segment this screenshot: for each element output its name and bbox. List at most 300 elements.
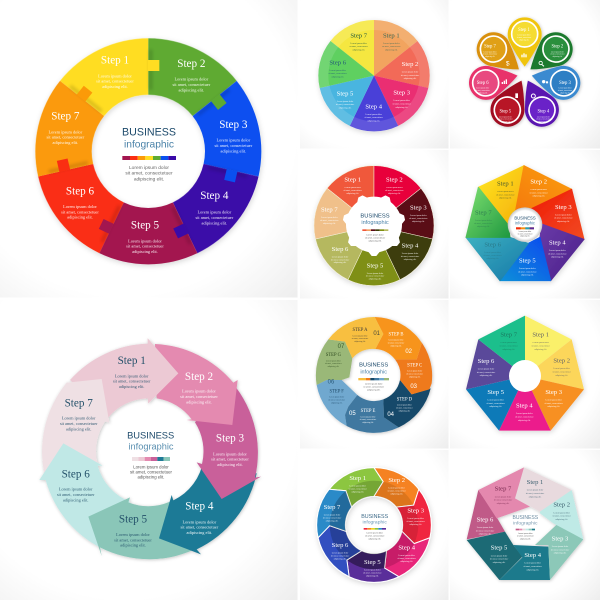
step labels: Lorem ipsum dolor (182, 519, 217, 524)
step labels: Step 2 (530, 179, 547, 186)
step labels: Step 5 (487, 389, 505, 396)
step labels: sit amet, consectetuer (352, 338, 369, 340)
step labels: adipiscing elit. (67, 215, 93, 220)
step labels: Lorem ipsum dolor (518, 35, 531, 37)
step labels: Step 1 (101, 55, 129, 67)
step labels: adipiscing elit. (478, 91, 488, 94)
step labels: Step 3 (552, 535, 569, 542)
step labels: Lorem ipsum dolor (527, 490, 543, 492)
step labels: Lorem ipsum dolor (495, 496, 511, 498)
step labels: Lorem ipsum dolor (216, 138, 251, 143)
center title (514, 216, 536, 238)
step labels: Step 2 (388, 477, 405, 484)
panel: pastel arrow ring (39, 338, 261, 559)
step labels: sit amet, consectetuer (490, 559, 508, 561)
center title: Lorem ipsum dolor (129, 165, 169, 171)
center title: sit amet, consectetuer (365, 236, 385, 239)
center title: infographic (362, 520, 387, 526)
step labels: Lorem ipsum dolor (329, 397, 344, 399)
step labels: sit amet, consectetuer (215, 143, 253, 149)
center title (512, 515, 539, 540)
step labels: Step 6 (66, 186, 95, 198)
step labels: adipiscing elit. (529, 495, 542, 498)
step labels (477, 332, 571, 422)
step labels: Step 1 (518, 28, 531, 33)
step labels: sit amet, consectetuer (483, 255, 502, 257)
step labels: Step 2 (553, 358, 570, 365)
step labels: Step 7 (484, 45, 497, 50)
center title: BUSINESS (360, 214, 390, 220)
step numbers: 01 (373, 331, 381, 337)
step labels: Step 3 (393, 90, 411, 97)
step labels: adipiscing elit. (534, 348, 547, 351)
step labels: Lorem ipsum dolor (388, 487, 405, 489)
panel: folded heptagon (467, 467, 583, 580)
step labels: Step 5 (519, 258, 536, 265)
step labels: Step 4 (537, 110, 550, 115)
step labels: Step 2 (185, 371, 213, 383)
step labels: STEP G (326, 353, 342, 358)
step labels: Step 7 (51, 111, 80, 123)
step labels: adipiscing elit. (497, 502, 510, 505)
step labels: adipiscing elit. (186, 530, 212, 535)
step labels: Step 4 (549, 240, 566, 247)
step numbers: 06 (328, 380, 335, 386)
step labels: Lorem ipsum dolor (484, 252, 501, 254)
step labels: adipiscing elit. (499, 196, 512, 199)
step labels: sit amet, consectetuer (552, 516, 571, 518)
step labels: adipiscing elit. (323, 222, 336, 225)
step labels: Lorem ipsum dolor (48, 129, 83, 134)
step labels (476, 479, 571, 571)
step labels: adipiscing elit. (334, 557, 347, 560)
step numbers: 05 (349, 411, 356, 417)
step labels: sit amet, consectetuer (173, 82, 211, 88)
step labels: adipiscing elit. (186, 399, 212, 404)
step labels: sit amet, consectetuer (57, 492, 95, 498)
step labels: Lorem ipsum dolor (519, 268, 536, 270)
step labels: adipiscing elit. (326, 519, 339, 522)
step labels: Lorem ipsum dolor (476, 88, 490, 90)
step numbers (328, 331, 418, 418)
center title: BUSINESS (127, 431, 174, 441)
step numbers: 04 (387, 412, 395, 418)
step labels: adipiscing elit. (489, 405, 502, 408)
step labels: sit amet, consectetuer (387, 490, 406, 492)
panel: teardrop pins (466, 17, 584, 132)
step labels: Lorem ipsum dolor (367, 273, 383, 275)
step labels: sit amet, consectetuer (498, 119, 513, 121)
ring pieces (316, 317, 432, 433)
step labels: STEP D (397, 397, 413, 402)
step labels: Step 7 (495, 486, 512, 493)
step labels: adipiscing elit. (352, 48, 365, 51)
step labels: sit amet, consectetuer (550, 54, 565, 56)
step labels: adipiscing elit. (63, 497, 89, 502)
step labels: sit amet, consectetuer (396, 407, 413, 409)
step labels: Step 4 (185, 500, 214, 512)
step labels: adipiscing elit. (412, 220, 425, 223)
center title: Lorem ipsum dolor (518, 532, 533, 535)
step labels: Lorem ipsum dolor (397, 405, 412, 407)
step labels: sit amet, consectetuer (401, 75, 419, 77)
step labels (328, 32, 419, 122)
step labels: sit amet, consectetuer (392, 103, 411, 105)
step labels: adipiscing elit. (404, 258, 417, 261)
center title: sit amet, consectetuer (518, 232, 533, 235)
step labels: Step 5 (499, 110, 512, 115)
step labels: adipiscing elit. (502, 348, 515, 351)
panel: numbered step A to G ring (316, 317, 432, 433)
step labels: adipiscing elit. (480, 374, 493, 377)
step labels: Lorem ipsum dolor (499, 116, 512, 118)
step labels: Lorem ipsum dolor (329, 70, 346, 72)
step labels: Step 6 (477, 516, 494, 523)
panel: rainbow puzzle ring (19, 12, 292, 291)
center title: adipiscing elit. (520, 537, 531, 540)
step labels: Lorem ipsum dolor (524, 563, 541, 565)
step labels: Step 2 (386, 177, 403, 184)
step labels: adipiscing elit. (369, 277, 382, 280)
step labels: Step 3 (559, 81, 572, 86)
step labels: sit amet, consectetuer (515, 416, 534, 418)
heptagon wedges (466, 316, 584, 431)
step labels: sit amet, consectetuer (211, 457, 249, 463)
step labels: Step 4 (402, 243, 419, 250)
center title: adipiscing elit. (368, 239, 382, 242)
pin icons: $ (506, 61, 510, 68)
step labels: adipiscing elit. (521, 273, 534, 276)
step labels: Step 6 (332, 542, 349, 549)
step labels: Lorem ipsum dolor (559, 88, 572, 90)
step labels (47, 55, 253, 254)
step labels: Lorem ipsum dolor (386, 187, 403, 189)
step labels: Step 5 (337, 90, 354, 97)
step labels: sit amet, consectetuer (60, 421, 98, 427)
step labels: Step 1 (532, 332, 549, 339)
step labels: Lorem ipsum dolor (477, 527, 493, 529)
step labels: sit amet, consectetuer (366, 276, 384, 278)
step labels: Lorem ipsum dolor (402, 71, 418, 73)
step labels: sit amet, consectetuer (113, 379, 151, 385)
step labels: adipiscing elit. (120, 543, 146, 548)
step labels: sit amet, consectetuer (348, 488, 367, 490)
step labels: Step 5 (367, 262, 384, 269)
step labels: STEP B (389, 332, 403, 337)
step labels: Lorem ipsum dolor (497, 191, 514, 193)
step labels: STEP F (329, 389, 344, 394)
step labels: sit amet, consectetuer (343, 190, 362, 192)
step labels: Lorem ipsum dolor (361, 416, 376, 418)
step labels: adipiscing elit. (351, 490, 364, 493)
step labels: Step 1 (383, 32, 400, 39)
step labels: sit amet, consectetuer (196, 215, 234, 221)
step labels: sit amet, consectetuer (406, 521, 425, 523)
step labels: Lorem ipsum dolor (115, 373, 149, 378)
step numbers: 07 (338, 344, 345, 350)
center title: adipiscing elit. (367, 389, 381, 392)
step labels: sit amet, consectetuer (554, 218, 573, 220)
step labels: adipiscing elit. (217, 462, 243, 467)
step labels: Lorem ipsum dolor (383, 43, 400, 45)
step labels: adipiscing elit. (119, 384, 145, 389)
step labels: Step 4 (398, 545, 416, 552)
step labels: Lorem ipsum dolor (213, 451, 247, 456)
step labels: STEP E (361, 409, 376, 414)
center title: adipiscing elit. (368, 538, 381, 541)
step labels: adipiscing elit. (220, 148, 246, 153)
step labels: Step 7 (65, 397, 93, 409)
step labels: Lorem ipsum dolor (475, 220, 492, 222)
step labels: Lorem ipsum dolor (364, 569, 381, 571)
step labels: Lorem ipsum dolor (500, 342, 517, 344)
step labels: sit amet, consectetuer (544, 403, 563, 405)
center title (358, 363, 389, 392)
step labels: sit amet, consectetuer (526, 493, 544, 495)
step labels: Lorem ipsum dolor (353, 335, 368, 337)
step labels: Lorem ipsum dolor (174, 77, 209, 82)
center title: Lorem ipsum dolor (366, 233, 384, 236)
center hole (509, 360, 541, 392)
step labels: Step 3 (219, 119, 248, 131)
step labels: Step 5 (364, 559, 381, 566)
step labels: sit amet, consectetuer (531, 345, 550, 347)
step labels: sit amet, consectetuer (409, 218, 428, 220)
center title: BUSINESS (359, 363, 388, 369)
step labels: adipiscing elit. (555, 518, 568, 521)
step labels: sit amet, consectetuer (529, 192, 548, 194)
center title: adipiscing elit. (520, 235, 530, 238)
step labels: sit amet, consectetuer (406, 373, 423, 375)
step labels: adipiscing elit. (385, 48, 398, 51)
step labels: adipiscing elit. (555, 374, 568, 377)
step labels: Step 4 (200, 190, 229, 202)
step labels: adipiscing elit. (178, 87, 204, 92)
step labels: sit amet, consectetuer (401, 256, 419, 258)
step labels: Lorem ipsum dolor (549, 250, 566, 252)
step labels: Lorem ipsum dolor (530, 189, 547, 191)
step labels: adipiscing elit. (547, 405, 560, 408)
center title (122, 126, 176, 182)
step labels: Step 3 (216, 432, 245, 444)
step labels: sit amet, consectetuer (331, 259, 349, 261)
step labels: adipiscing elit. (334, 261, 347, 264)
step labels: Lorem ipsum dolor (545, 399, 562, 401)
step labels: Lorem ipsum dolor (555, 214, 572, 216)
step labels: adipiscing elit. (399, 409, 411, 412)
step labels: sit amet, consectetuer (181, 525, 219, 531)
step labels: Lorem ipsum dolor (516, 413, 533, 415)
step labels: Step 7 (350, 32, 368, 39)
puzzle tabs (48, 50, 247, 245)
center title: sit amet, consectetuer (125, 171, 173, 177)
step labels: Step 3 (410, 205, 427, 212)
center title: Lorem ipsum dolor (366, 532, 383, 535)
step labels: adipiscing elit. (346, 192, 359, 195)
step labels: sit amet, consectetuer (363, 572, 382, 574)
step labels: Step 1 (118, 355, 146, 367)
center title: sit amet, consectetuer (363, 386, 384, 389)
step labels: Step 4 (524, 552, 542, 559)
center title: sit amet, consectetuer (365, 535, 385, 538)
step labels: Step 6 (478, 358, 495, 365)
step labels: sit amet, consectetuer (517, 37, 532, 39)
step labels: adipiscing elit. (519, 38, 529, 41)
step labels: Step 6 (329, 59, 347, 66)
step labels: sit amet, consectetuer (126, 244, 164, 250)
center title: Lorem ipsum dolor (133, 464, 169, 469)
step labels: Lorem ipsum dolor (62, 416, 96, 421)
step labels: Lorem ipsum dolor (393, 100, 410, 102)
step labels: Lorem ipsum dolor (116, 532, 150, 537)
step labels: sit amet, consectetuer (61, 209, 99, 215)
step labels: Lorem ipsum dolor (324, 514, 340, 516)
step labels: Lorem ipsum dolor (321, 217, 338, 219)
step labels: adipiscing elit. (493, 561, 506, 564)
step labels: adipiscing elit. (331, 401, 343, 404)
step labels: Lorem ipsum dolor (63, 204, 97, 209)
step labels: Lorem ipsum dolor (478, 368, 494, 370)
step labels: adipiscing elit. (390, 344, 402, 347)
step labels: Lorem ipsum dolor (365, 114, 382, 116)
step labels: Step 2 (553, 502, 570, 509)
step labels: sit amet, consectetuer (114, 537, 152, 543)
step labels: sit amet, consectetuer (331, 555, 349, 557)
step labels: Step 1 (527, 479, 543, 486)
step labels: adipiscing elit. (485, 55, 495, 58)
arrow segments (39, 338, 261, 559)
step labels: adipiscing elit. (500, 120, 511, 123)
step labels (476, 28, 573, 123)
chevron segments (308, 454, 447, 596)
step labels: adipiscing elit. (518, 419, 531, 422)
step labels: sit amet, consectetuer (360, 419, 377, 421)
step labels: adipiscing elit. (354, 340, 366, 343)
step labels: Step 1 (349, 475, 366, 482)
step labels: adipiscing elit. (560, 91, 570, 94)
step labels: Lorem ipsum dolor (532, 342, 549, 344)
step labels: Lorem ipsum dolor (332, 256, 348, 258)
step labels: sit amet, consectetuer (486, 403, 505, 405)
step labels: sit amet, consectetuer (476, 530, 494, 532)
step labels: Step 6 (332, 246, 349, 253)
step labels: sit amet, consectetuer (494, 500, 512, 502)
step labels: Lorem ipsum dolor (398, 555, 415, 557)
step labels: sit amet, consectetuer (483, 54, 498, 56)
step numbers: 03 (410, 384, 418, 390)
step labels: adipiscing elit. (532, 194, 545, 197)
step labels: Step 5 (131, 219, 160, 231)
step labels: sit amet, consectetuer (320, 220, 339, 222)
center title: infographic (360, 369, 387, 375)
step labels: Step 2 (177, 58, 205, 70)
panel: pie chart seven steps (310, 7, 445, 145)
step labels: sit amet, consectetuer (364, 117, 383, 119)
step labels: Lorem ipsum dolor (344, 187, 361, 189)
step labels: Step 7 (321, 207, 338, 214)
step labels: Step 4 (365, 103, 383, 110)
hub (508, 207, 542, 242)
step labels: sit amet, consectetuer (328, 73, 347, 75)
step labels: Step 3 (407, 508, 425, 515)
step labels: Lorem ipsum dolor (98, 73, 132, 78)
center title: adipiscing elit. (134, 176, 164, 182)
step labels: sit amet, consectetuer (496, 194, 515, 196)
center title: BUSINESS (514, 216, 536, 221)
panel: chevron ring (308, 454, 447, 596)
step labels: Step 6 (484, 241, 502, 248)
center title: infographic (361, 220, 389, 226)
step labels: sit amet, consectetuer (336, 104, 354, 106)
gear center (342, 194, 406, 256)
step labels: adipiscing elit. (367, 119, 380, 122)
step labels: sit amet, consectetuer (552, 371, 571, 373)
step labels: Lorem ipsum dolor (350, 43, 367, 45)
step labels (323, 475, 425, 577)
panel: twisted heptagon (466, 166, 584, 281)
center title (360, 214, 390, 242)
step labels: sit amet, consectetuer (328, 399, 345, 401)
step labels: adipiscing elit. (362, 421, 374, 424)
step numbers: 02 (405, 349, 413, 355)
step labels: Lorem ipsum dolor (59, 487, 93, 492)
pin shapes (466, 17, 584, 132)
step labels: sit amet, consectetuer (523, 566, 542, 568)
step labels: Lorem ipsum dolor (487, 399, 504, 401)
step labels: sit amet, consectetuer (536, 119, 551, 121)
step labels: adipiscing elit. (479, 533, 492, 536)
step labels: Step 2 (402, 61, 418, 68)
step labels: Lorem ipsum dolor (337, 101, 353, 103)
folded pieces (467, 467, 583, 580)
center title: adipiscing elit. (138, 475, 164, 480)
center title: infographic (515, 220, 535, 225)
step labels (57, 355, 249, 548)
step labels: adipiscing elit. (66, 426, 92, 431)
step labels: adipiscing elit. (477, 225, 490, 228)
center title: infographic (124, 140, 174, 151)
step labels: Lorem ipsum dolor (407, 371, 422, 373)
step labels: sit amet, consectetuer (548, 253, 567, 255)
panel: gear center ring (305, 152, 450, 300)
step labels: adipiscing elit. (400, 560, 413, 563)
panel: flat heptagon (466, 316, 584, 431)
step labels: Lorem ipsum dolor (410, 215, 427, 217)
center title: BUSINESS (361, 514, 389, 520)
center title: Lorem ipsum dolor (519, 230, 532, 233)
pie sectors (310, 7, 445, 145)
step labels: Lorem ipsum dolor (349, 485, 366, 487)
step labels: sit amet, consectetuer (323, 517, 341, 519)
step labels: Lorem ipsum dolor (553, 368, 570, 370)
center title: sit amet, consectetuer (517, 535, 534, 538)
step labels (320, 177, 428, 280)
step labels: Lorem ipsum dolor (537, 116, 550, 118)
step labels: sit amet, consectetuer (349, 46, 368, 48)
step labels: adipiscing elit. (538, 120, 549, 123)
step labels: Step 7 (324, 504, 341, 511)
step labels: Step 3 (545, 389, 563, 396)
step labels: Lorem ipsum dolor (197, 210, 232, 215)
center title: Lorem ipsum dolor (365, 383, 383, 386)
step labels: Lorem ipsum dolor (407, 518, 424, 520)
step labels: Step 5 (119, 513, 148, 525)
step labels: adipiscing elit. (328, 365, 340, 368)
step labels: sit amet, consectetuer (551, 549, 569, 551)
step labels: sit amet, consectetuer (397, 558, 416, 560)
step labels: sit amet, consectetuer (477, 372, 495, 374)
step labels: Lorem ipsum dolor (552, 546, 568, 548)
